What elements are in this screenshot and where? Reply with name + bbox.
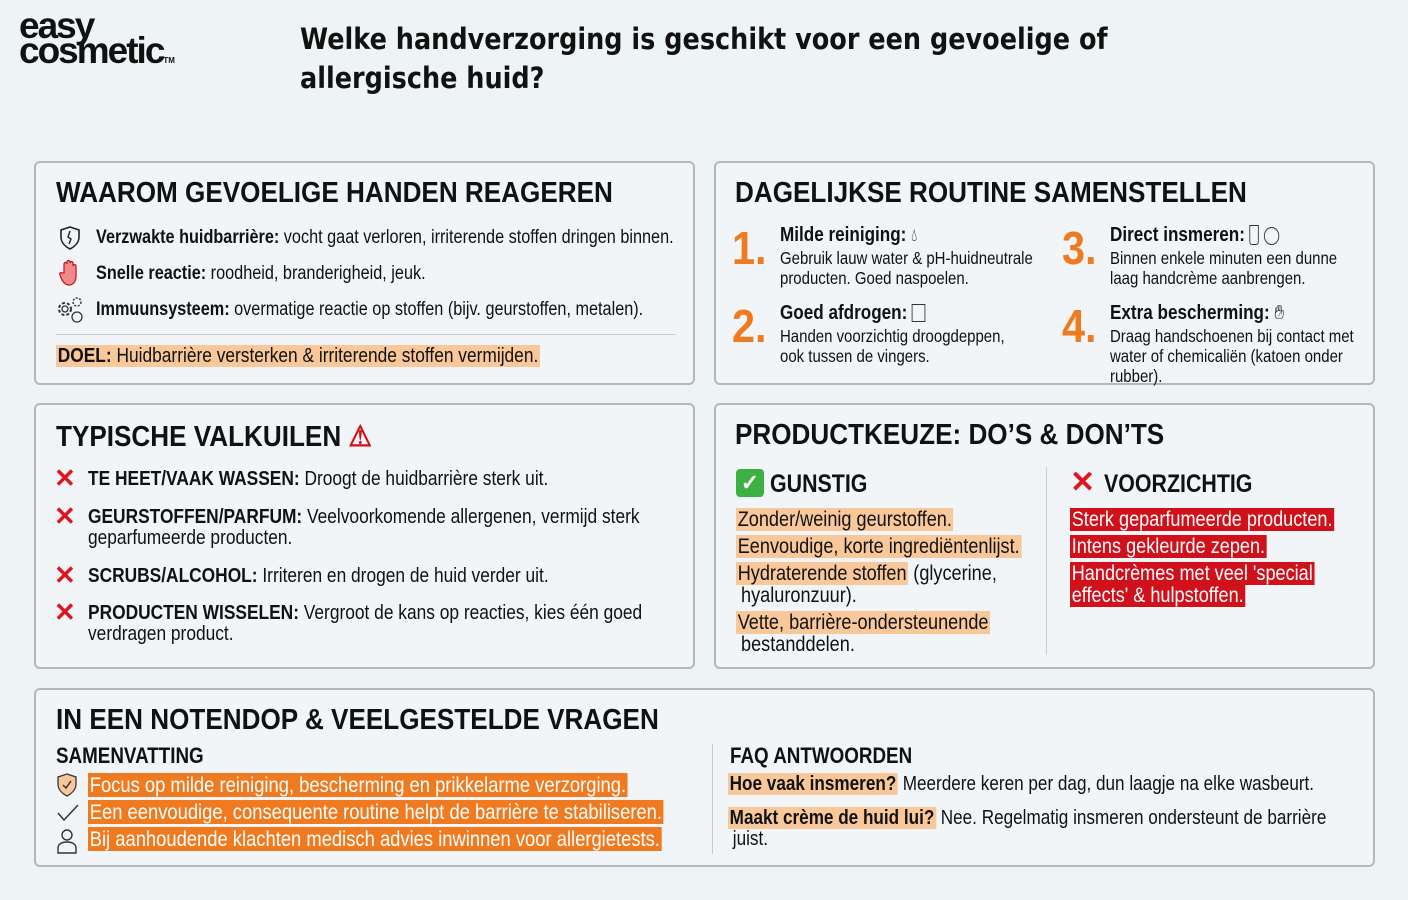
heading: WAAROM GEVOELIGE HANDEN REAGEREN	[56, 177, 613, 209]
step 2: 2.	[732, 300, 767, 352]
heading: PRODUCTKEUZE: DO’S & DON’TS	[735, 419, 1164, 451]
step 3: 3.	[1062, 222, 1097, 274]
logo: easy	[19, 5, 93, 46]
step 1	[732, 222, 1033, 288]
icon: hand	[59, 260, 77, 286]
step 4: Extra bescherming: ✋︎	[1110, 302, 1284, 324]
column: voorzichtig: ✕	[1070, 466, 1095, 499]
item 2	[54, 501, 640, 549]
step 2: Goed afdrogen:	[780, 302, 907, 324]
step 1: Gebruik lauw water & pH-huidneutrale	[780, 248, 1033, 268]
column: voorzichtig: VOORZICHTIG	[1104, 470, 1252, 498]
panel: routine	[714, 161, 1375, 385]
faq: FAQ ANTWOORDEN	[730, 743, 912, 768]
step 4: rubber).	[1110, 366, 1162, 386]
item 4: verdragen product.	[88, 623, 234, 645]
column: voorzichtig: effects' & hulpstoffen.	[1072, 584, 1244, 607]
faq: Maakt crème de huid lui? Nee. Regelmatig insmeren ondersteunt de barrière	[730, 807, 1326, 829]
item 1	[54, 463, 548, 493]
step 2: Handen voorzichtig droogdeppen,	[780, 326, 1005, 346]
panel: waarom	[34, 161, 695, 385]
step 3: laag handcrème aanbrengen.	[1110, 268, 1306, 288]
step 1: Milde reiniging: 💧︎	[780, 224, 917, 246]
column: gunstig: Eenvoudige, korte ingrediëntenlijst.	[738, 535, 1020, 558]
column: gunstig: Hydraterende stoffen (glycerine,	[738, 562, 997, 585]
text: immuun: Immuunsysteem: overmatige reactie op stoffen (bijv. geurstoffen, metalen).	[96, 299, 643, 320]
column: gunstig: ✓	[741, 470, 759, 495]
samenvatting: SAMENVATTING	[56, 743, 204, 768]
step 2	[732, 300, 1005, 366]
step 4: 4.	[1062, 300, 1097, 352]
column: gunstig: bestanddelen.	[741, 633, 855, 656]
step 1: producten. Goed naspoelen.	[780, 268, 969, 288]
item 1: ✕	[54, 463, 76, 493]
icon: shield	[60, 226, 80, 250]
item 2: geparfumeerde producten.	[88, 527, 292, 549]
title	[300, 22, 1108, 95]
step 3: Direct insmeren:	[1110, 224, 1245, 246]
step 3	[1062, 222, 1337, 288]
heading: DAGELIJKSE ROUTINE SAMENSTELLEN	[735, 177, 1247, 209]
step 2: ook tussen de vingers.	[780, 346, 930, 366]
column: voorzichtig: Intens gekleurde zepen.	[1072, 535, 1265, 558]
step 4: water of chemicaliën (katoen onder	[1110, 346, 1343, 366]
samenvatting	[56, 743, 664, 854]
item 3	[54, 560, 549, 590]
panel: notendop	[34, 688, 1375, 867]
logo: cosmeticTM	[19, 30, 175, 71]
column: gunstig: Zonder/weinig geurstoffen.	[738, 508, 952, 531]
step 4: Draag handschoenen bij contact met	[1110, 326, 1354, 346]
logo	[19, 5, 175, 71]
samenvatting: Focus op milde reiniging, bescherming en prikkelarme verzorging.	[90, 773, 626, 797]
title: Welke handverzorging is geschikt voor een gevoelige of	[300, 22, 1108, 56]
item 1: TE HEET/VAAK WASSEN: Droogt de huidbarrière sterk uit.	[88, 468, 548, 490]
faq: juist.	[733, 828, 768, 850]
heading: IN EEN NOTENDOP & VEELGESTELDE VRAGEN	[56, 704, 659, 736]
item 3: SCRUBS/ALCOHOL: Irriteren en drogen de huid verder uit.	[88, 565, 549, 587]
step 4	[1062, 300, 1354, 386]
panel: productkeuze	[714, 403, 1375, 669]
text: reactie: Snelle reactie: roodheid, branderigheid, jeuk.	[96, 263, 426, 284]
column: voorzichtig: Handcrèmes met veel 'special	[1072, 562, 1313, 585]
column: gunstig: hyaluronzuur).	[741, 584, 857, 607]
samenvatting: Bij aanhoudende klachten medisch advies inwinnen voor allergietests.	[90, 827, 660, 851]
step 1: 1.	[732, 222, 767, 274]
faq: Hoe vaak insmeren? Meerdere keren per dag, dun laagje na elke wasbeurt.	[730, 773, 1314, 795]
item 4	[54, 597, 642, 645]
icon: gears	[58, 297, 83, 323]
column: gunstig: GUNSTIG	[770, 470, 867, 498]
heading: TYPISCHE VALKUILEN ⚠︎	[56, 421, 372, 453]
item 4: ✕	[54, 597, 76, 627]
item 3: ✕	[54, 560, 76, 590]
column: gunstig: Vette, barrière-ondersteunende	[738, 611, 988, 634]
title: allergische huid?	[300, 61, 544, 95]
step 3: Binnen enkele minuten een dunne	[1110, 248, 1337, 268]
column: voorzichtig	[1070, 466, 1334, 607]
item 2: GEURSTOFFEN/PARFUM: Veelvoorkomende allergenen, vermijd sterk	[88, 506, 640, 528]
panel: valkuilen	[34, 403, 695, 669]
item 2: ✕	[54, 501, 76, 531]
faq	[728, 743, 1326, 850]
item 4: PRODUCTEN WISSELEN: Vergroot de kans op reacties, kies één goed	[88, 602, 642, 624]
doel: DOEL: Huidbarrière versterken & irriterende stoffen vermijden.	[58, 345, 538, 367]
text: barriere: Verzwakte huidbarrière: vocht gaat verloren, irriterende stoffen dringen binnen.	[96, 227, 674, 248]
column: voorzichtig: Sterk geparfumeerde producten.	[1072, 508, 1333, 531]
column: gunstig	[736, 469, 1022, 656]
samenvatting: Een eenvoudige, consequente routine helpt de barrière te stabiliseren.	[90, 800, 662, 824]
